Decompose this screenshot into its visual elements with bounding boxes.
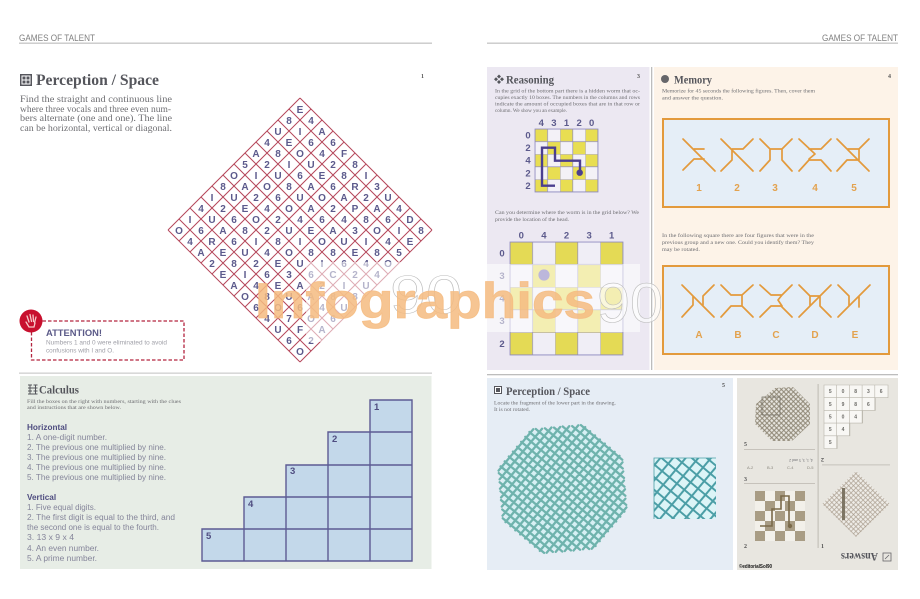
lattice instructions [494, 400, 617, 413]
answer 4: number table: 54 [829, 427, 845, 433]
figure box 1 to 5: 5 [851, 183, 857, 194]
example grid: 2 [525, 181, 531, 192]
watermark: infographics90: 90 [390, 265, 462, 325]
example grid: 0 [525, 130, 531, 142]
reasoning intro: column. We show you an example. [495, 108, 568, 114]
panel: calculus [20, 376, 432, 569]
answer 5: octagon: 5 [744, 442, 747, 448]
diamond letter grid: OIU6E8I [230, 171, 368, 182]
diamond letter grid: 4R6I8IOUI4E [187, 237, 414, 248]
instructions: Fill the boxes on the right with numbers, starting with the clues [27, 399, 181, 405]
reasoning intro: indicate the amount of occupied boxes that are in that row or [495, 100, 640, 108]
answer 3: upside down memory solution: C-4 [787, 465, 794, 470]
answer 1: diamond [821, 471, 890, 550]
heading: reasoning: Reasoning [506, 74, 554, 86]
figure box A to E: D [811, 330, 819, 341]
diamond letter grid: 62 [286, 336, 314, 347]
intro text: can be horizontal, vertical or diagonal. [20, 124, 172, 134]
example grid: 43120 [539, 118, 594, 129]
figure box 1 to 5: 3 [772, 183, 778, 194]
divider between panels [651, 67, 652, 370]
intro text: where three vocals and three even num- [20, 105, 171, 115]
icon: reasoning diamonds [494, 74, 504, 84]
second instructions [662, 232, 815, 253]
second instructions: may be rotated. [662, 247, 701, 253]
clues: vertical [27, 493, 175, 563]
heading: memory: Memory [674, 74, 712, 86]
example grid [525, 118, 598, 192]
right page header: GAMES OF TALENT [822, 33, 898, 43]
icon: red hand [20, 310, 42, 332]
left page header: GAMES OF TALENT [19, 33, 95, 43]
lattice instructions: Locate the fragment of the lower part in the drawing. [494, 400, 617, 406]
heading: calculus: Calculus [39, 384, 79, 396]
instructions [27, 399, 181, 411]
callout: attention: confusions with I and O. [46, 348, 114, 354]
answer 2: worm grid: 2 [744, 544, 747, 550]
clues: vertical: 4. An even number. [27, 544, 99, 553]
panel: perception space lattice [475, 378, 733, 576]
diamond letter grid: 84 [286, 116, 314, 127]
figure box A to E: A [695, 330, 703, 341]
icon: memory circle [661, 75, 669, 83]
diamond letter grid: A4EA2IU [230, 281, 370, 292]
puzzle question [495, 210, 640, 223]
answer 3: upside down memory solution: A-2 [747, 465, 754, 470]
memory instructions [662, 88, 816, 102]
memory instructions: and answer the question. [662, 96, 724, 102]
worm head dot [538, 269, 550, 281]
clues: vertical: 1. Five equal digits. [27, 503, 96, 512]
staircase number grid: 5 [206, 531, 212, 542]
clues: vertical: 2. The first digit is equal to the third, and [27, 513, 175, 522]
callout: attention [20, 310, 184, 360]
diamond letter grid: 6O64U [253, 303, 348, 314]
diamond letter grid: 42E4OA2PA4 [198, 204, 402, 215]
watermark: infographics90: 90 [597, 271, 663, 334]
diamond letter grid: AEU4O88E85 [197, 248, 402, 259]
staircase number grid: 3 [290, 466, 295, 477]
page number 4: 4 [888, 74, 891, 80]
page number 1: 1 [421, 74, 424, 80]
diamond letter grid: O8UA88 [241, 292, 358, 303]
answer 4: number table: 2 [821, 456, 824, 462]
panel: reasoning [487, 67, 650, 370]
diamond letter grid: UFA [274, 325, 326, 336]
heading: perception space: Perception / Space [36, 72, 159, 89]
answers heading upside down [841, 550, 891, 562]
panel: memory [654, 67, 898, 370]
clues: horizontal: 4. The previous one multiplied by nine. [27, 463, 166, 472]
clues: horizontal: 1. A one-digit number. [27, 433, 107, 442]
page number 5: 5 [722, 383, 725, 389]
clues: vertical: the second one is equal to the fourth. [27, 523, 159, 532]
diamond letter grid: O6A82UEA3OI8 [175, 226, 424, 237]
reasoning intro: In the grid of the bottom part there is a hidden worm that oc- [495, 88, 640, 94]
diamond letter grid: A8O4F [252, 149, 347, 160]
diamond letter grid: 282EUI64O [209, 259, 392, 270]
clues: horizontal: Horizontal [27, 423, 67, 432]
clues: vertical: 3. 13 x 9 x 4 [27, 533, 75, 542]
answer 3: upside down memory solution: D-5 [807, 465, 814, 470]
puzzle grid: 4 [499, 294, 505, 304]
answer 1: diamond: 1 [821, 544, 824, 550]
answers heading upside down: Answers [841, 550, 878, 562]
icon: perception dice [494, 386, 502, 394]
clues: horizontal: 3. The previous one multiplied by nine. [27, 453, 166, 462]
reasoning intro: cupies exactly 10 boxes. The numbers in the columns and rows [495, 95, 640, 101]
staircase number grid: 1 [374, 402, 380, 413]
clues: horizontal: 2. The previous one multiplied by nine. [27, 443, 166, 452]
diamond letter grid: E [297, 105, 304, 116]
answer 4: number table [821, 385, 890, 465]
puzzle question: Can you determine where the worm is in the grid below? We [495, 210, 640, 216]
figure box A to E [663, 266, 889, 354]
figure box 1 to 5: 2 [734, 183, 740, 194]
clues: horizontal [27, 423, 166, 482]
answer 4: number table: 5986 [829, 402, 870, 408]
answer 2: worm grid [744, 491, 805, 550]
clues: vertical: Vertical [27, 493, 56, 502]
watermark: infographics90: Infographics [255, 273, 595, 329]
puzzle grid [499, 230, 623, 355]
clues: horizontal: 5. The previous one multiplied by nine. [27, 473, 166, 482]
diamond letter grid: 47O6 [264, 314, 336, 325]
intro text [20, 95, 172, 134]
intro text: Find the straight and continuous line [20, 95, 172, 105]
reasoning intro [495, 88, 640, 114]
answer 5: octagon [744, 387, 810, 448]
figure box 1 to 5 [663, 119, 889, 207]
callout: attention: ATTENTION! [46, 328, 102, 339]
panel: answers [737, 378, 898, 570]
puzzle grid: 04231 [519, 230, 615, 242]
figure box 1 to 5: 1 [696, 183, 702, 194]
icon: calculus [28, 385, 38, 394]
puzzle grid: 2 [499, 339, 505, 350]
second instructions: In the following square there are four figures that were in the [662, 232, 815, 239]
figure box A to E: B [734, 330, 742, 341]
panel: perception space diamond puzzle [20, 72, 432, 362]
diamond letter grid: IU26UOA2U [211, 193, 392, 204]
staircase number grid: 2 [332, 434, 337, 445]
answer 4: number table: 50836 [829, 389, 883, 395]
puzzle grid: 3 [499, 271, 505, 282]
figure box A to E: C [772, 330, 780, 341]
octagon lattice [475, 402, 650, 576]
staircase number grid: 4 [248, 499, 254, 510]
diamond letter grid: IU6O246486D [189, 215, 414, 226]
figure box A to E: E [852, 330, 859, 341]
example grid: 2 [525, 168, 531, 179]
answer 3: upside down memory solution: 3 [744, 477, 747, 483]
worm path [542, 148, 583, 186]
heading: perception space: Perception / Space [506, 386, 590, 398]
credit: editorial sol90: ©editorialSol90 [739, 563, 772, 570]
answer 3: upside down memory solution: 4, 1, 3, 5 and 2 [789, 457, 813, 463]
diamond letter grid: O [296, 347, 304, 358]
second instructions: previous group and a new one. Could you identify them? They [662, 239, 814, 246]
memory instructions: Memorize for 45 seconds the following figures. Then, cover them [662, 88, 816, 94]
puzzle question: provide the location of the head. [495, 216, 570, 223]
icon: perception dice [20, 74, 32, 86]
lattice instructions: It is not rotated. [494, 407, 531, 413]
diamond letter grid: 52IU28 [242, 160, 358, 171]
page number 3: 3 [637, 74, 640, 80]
answer 3: upside down memory solution [744, 449, 815, 484]
puzzle grid: 3 [499, 316, 505, 327]
answer 4: number table: 5 [829, 440, 832, 446]
staircase number grid [202, 400, 412, 561]
watermark: infographics90 [255, 262, 663, 342]
puzzle grid: 0 [499, 248, 505, 260]
example grid: 4 [525, 156, 531, 167]
callout: attention: Numbers 1 and 0 were eliminated to avoid [46, 340, 167, 346]
clues: vertical: 5. A prime number. [27, 554, 97, 563]
diamond letter grid [168, 98, 432, 362]
answer 4: number table: 504 [829, 414, 857, 420]
answer 3: upside down memory solution: B-3 [767, 465, 774, 470]
intro text: bers alternate (one and one). The line [20, 113, 172, 124]
diamond letter grid: 8AO8A6R3 [220, 182, 380, 193]
instructions: and instructions that are shown below. [27, 405, 121, 411]
figure box 1 to 5: 4 [812, 183, 818, 194]
lattice fragment [654, 458, 716, 519]
diamond letter grid: EI636C24 [220, 270, 380, 281]
example grid: 2 [525, 143, 531, 154]
diamond letter grid: 4E66 [264, 138, 336, 149]
diamond letter grid: UIA [274, 127, 326, 138]
